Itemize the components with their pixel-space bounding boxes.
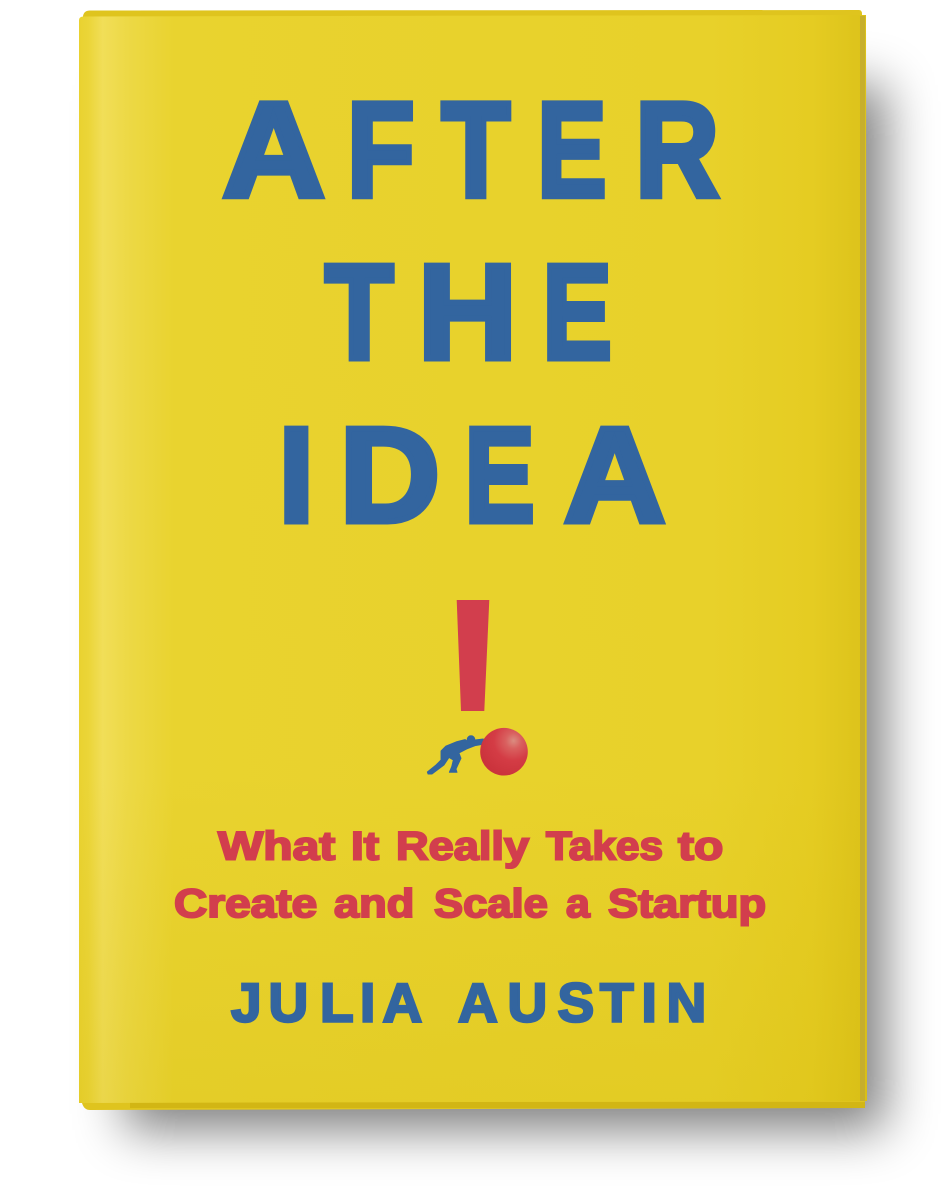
subtitle line 2: Create (174, 882, 317, 926)
title line: AFTER: E (537, 74, 607, 225)
title line: THE: E (542, 236, 612, 388)
book (79, 10, 867, 1110)
title: AFTER THE IDEA (222, 74, 719, 551)
book drop shadow (125, 85, 885, 1130)
title line: THE (325, 236, 612, 388)
subtitle line 2: Startup (608, 881, 766, 926)
subtitle line 2: and (334, 881, 414, 926)
author: JULIA AUSTIN (231, 972, 706, 1034)
bottom edge band (130, 1102, 865, 1108)
title line: AFTER (222, 74, 719, 226)
subtitle line 2: Scale (434, 881, 548, 926)
title line: IDEA: A (564, 400, 665, 551)
title line: AFTER: A (222, 75, 325, 226)
subtitle (174, 824, 766, 926)
title line: IDEA: I (278, 399, 314, 550)
title line: AFTER: T (442, 76, 510, 226)
icon: figure pushing red ball (427, 728, 528, 776)
front cover (79, 15, 867, 1103)
subtitle line 1: to (678, 824, 723, 869)
title line: AFTER: R (635, 74, 719, 225)
cover lower shading (79, 15, 867, 1103)
figure (427, 736, 484, 774)
author: JULIA AUSTIN: JULIA (231, 972, 422, 1034)
exclamation mark (457, 600, 489, 711)
subtitle line 1: Really (396, 824, 529, 869)
title line: AFTER: F (347, 75, 415, 226)
title line: THE: H (418, 237, 517, 387)
subtitle line 1: It (351, 824, 379, 869)
title line: IDEA: D (340, 400, 440, 551)
title line: THE: T (325, 238, 393, 388)
back cover edge (82, 10, 865, 1110)
subtitle line 1: Takes (546, 824, 663, 868)
red ball (480, 728, 528, 776)
author: JULIA AUSTIN: AUSTIN (458, 972, 706, 1034)
right spine fold (860, 16, 865, 1101)
subtitle line 2: a (566, 881, 591, 926)
subtitle line 2 (174, 881, 766, 926)
title line: IDEA: E (464, 399, 535, 550)
subtitle line 1 (218, 824, 723, 869)
title line: IDEA (278, 399, 665, 551)
subtitle line 1: What (218, 824, 336, 869)
